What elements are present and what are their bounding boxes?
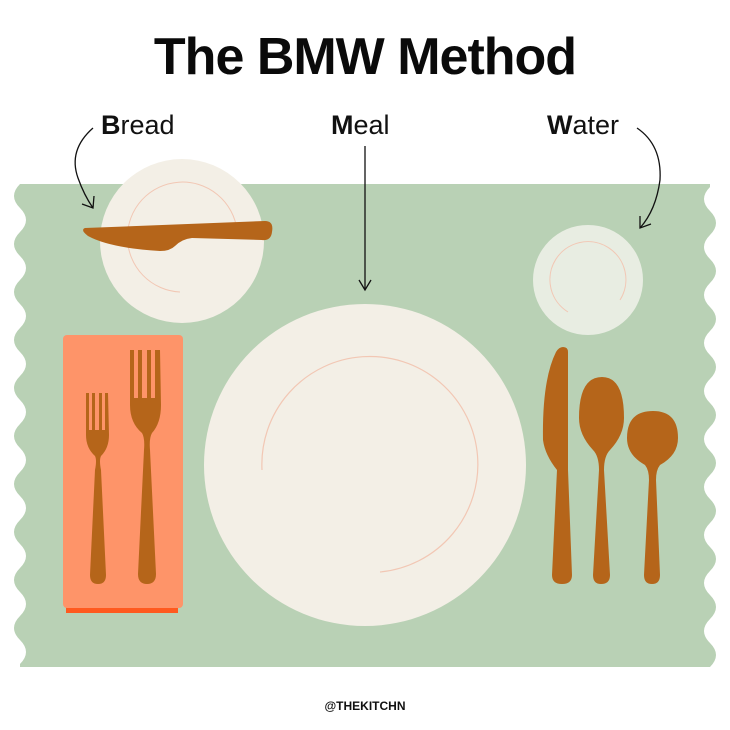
footer credit: @THEKITCHN — [324, 699, 406, 713]
icon: teaspoon — [579, 377, 624, 584]
icon: butter knife — [83, 221, 272, 251]
icon: large fork — [130, 350, 161, 584]
napkin with forks — [63, 335, 183, 613]
label: Meal: Meal — [331, 110, 390, 140]
icon: dinner knife — [543, 347, 572, 584]
title: The BMW Method — [154, 28, 576, 86]
placemat — [14, 184, 716, 667]
meal plate — [204, 304, 526, 626]
bread plate — [100, 159, 264, 323]
icon: soup spoon — [627, 411, 678, 584]
water plate — [533, 225, 643, 335]
label: Bread: Bread — [101, 110, 175, 140]
icon: small fork — [86, 393, 109, 584]
label: Water: Water — [547, 110, 619, 140]
arrow: water — [637, 128, 660, 228]
arrow: bread — [75, 128, 94, 208]
arrow: meal — [359, 146, 371, 290]
